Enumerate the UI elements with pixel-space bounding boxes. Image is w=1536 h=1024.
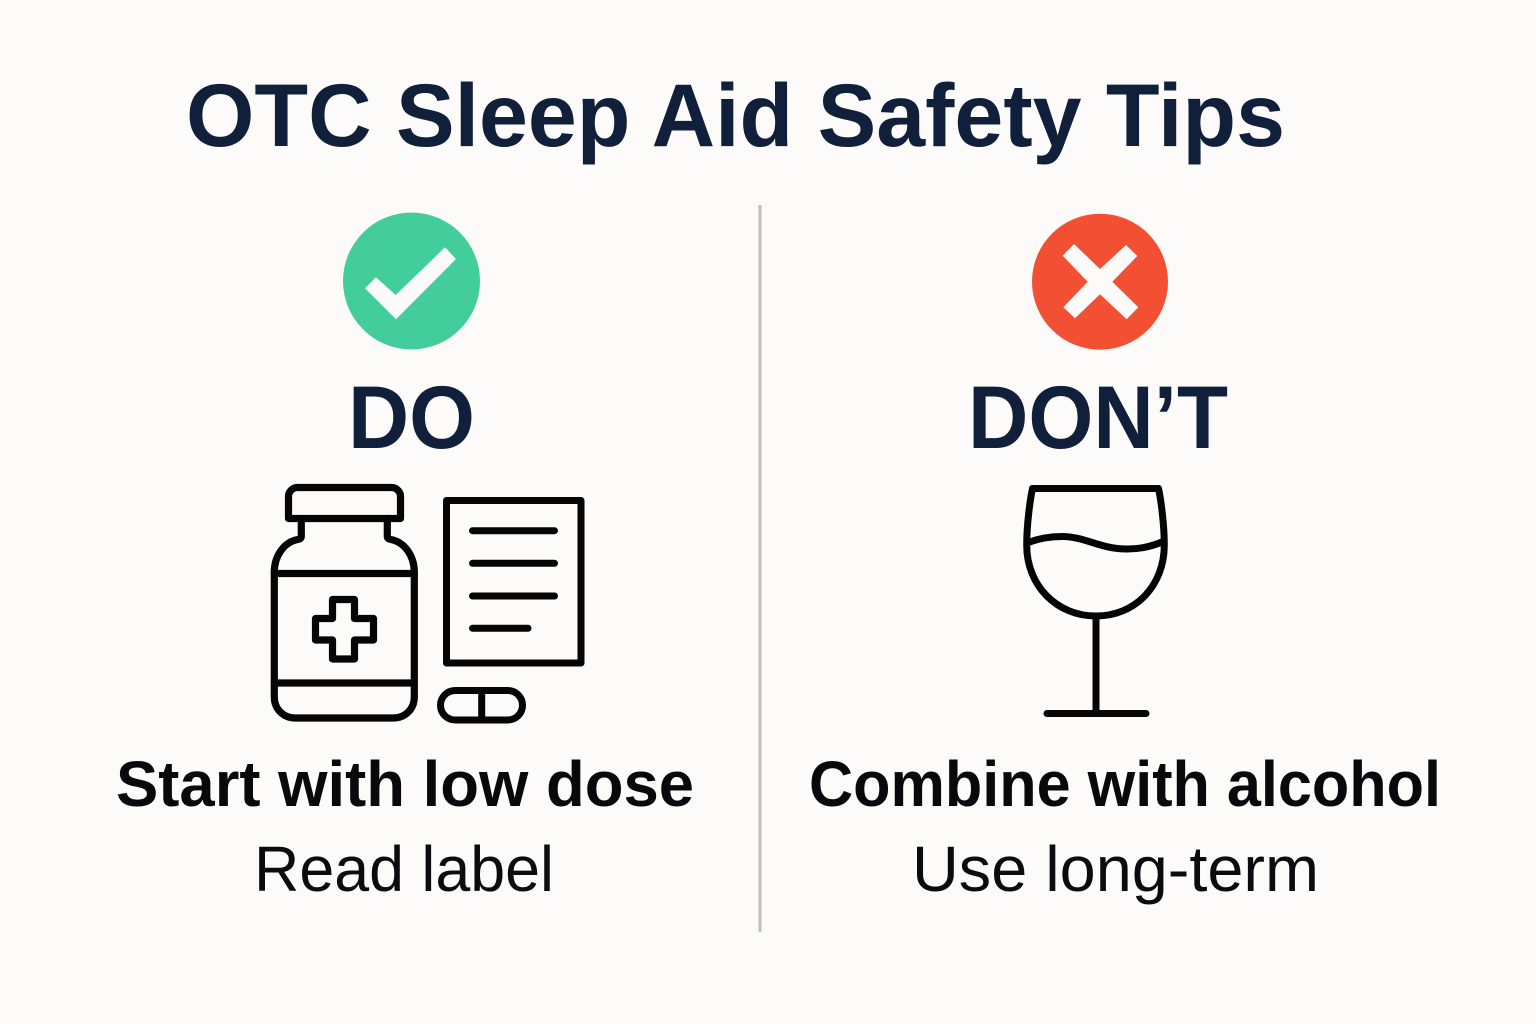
icon: medicine bottle <box>274 487 414 718</box>
heading: do: DO <box>348 367 475 467</box>
heading: don't: DON’T <box>968 367 1228 467</box>
icon: wine glass <box>1027 488 1164 714</box>
icon: red cross badge <box>1032 214 1168 350</box>
don't tip: combine with alcohol: Combine with alcohol <box>809 748 1441 820</box>
panel: do <box>116 212 694 905</box>
don't tip: use long-term: Use long-term <box>912 833 1319 905</box>
do tip: read label: Read label <box>254 833 554 905</box>
icon: green check badge <box>343 212 480 350</box>
icon: capsule pill <box>440 690 522 720</box>
title: OTC Sleep Aid Safety Tips <box>186 65 1285 165</box>
panel: don't <box>809 214 1441 905</box>
icon: label document <box>446 500 581 663</box>
do tip: start with low dose: Start with low dose <box>116 748 694 820</box>
